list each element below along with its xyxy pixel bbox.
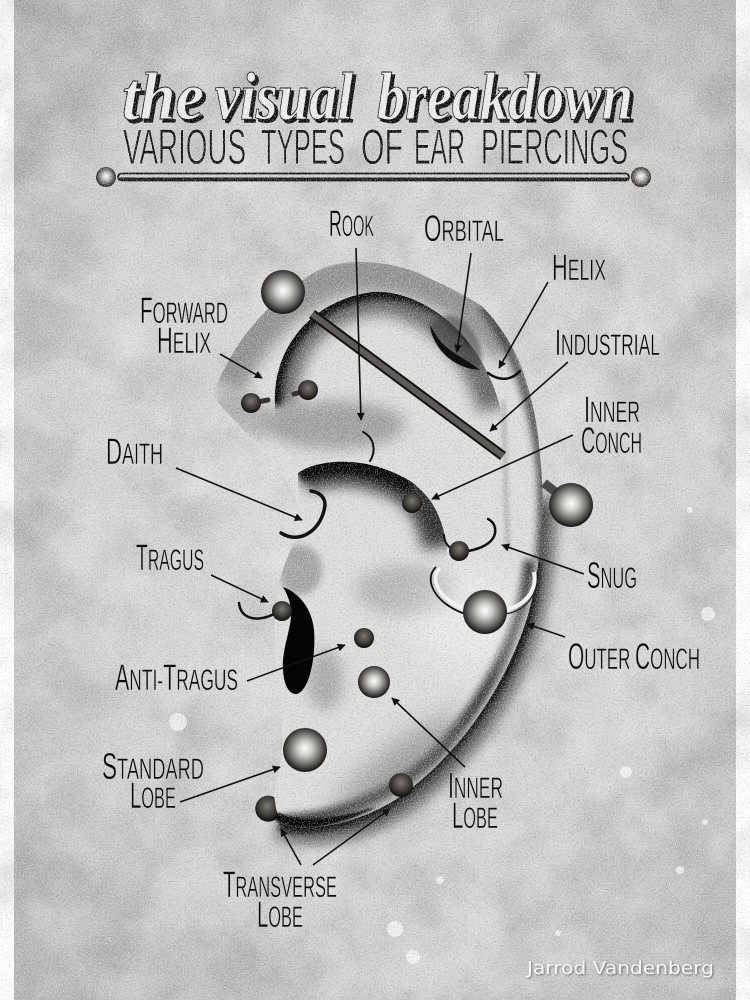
label: tragus	[136, 537, 268, 602]
label: helix	[499, 247, 606, 368]
label: outer conch: OUTER CONCH	[568, 636, 700, 677]
label: helix: HELIX	[552, 247, 606, 288]
piercing: industrial barbell	[312, 314, 593, 527]
label: inner lobe: LOBE	[452, 795, 498, 836]
title: the visual breakdown: the	[125, 61, 207, 137]
arrow: helix	[499, 282, 548, 368]
title: the visual breakdown	[122, 58, 636, 137]
piercing: inner conch	[402, 493, 422, 513]
label: transverse lobe: LOBE	[257, 894, 303, 935]
subtitle: various types of ear piercings: EAR	[414, 119, 465, 175]
subtitle: various types of ear piercings	[123, 119, 628, 175]
concha fold shadow	[298, 462, 447, 545]
piercing: anti-tragus	[354, 628, 374, 648]
label: standard lobe: STANDARD	[102, 746, 204, 787]
arrow: inner conch	[432, 435, 573, 499]
label: snug	[502, 545, 637, 596]
arrow: tragus	[211, 575, 268, 602]
label: orbital	[424, 208, 504, 352]
label: inner conch	[432, 389, 642, 499]
title: the visual breakdown: breakdown	[380, 61, 636, 137]
label: standard lobe	[102, 746, 280, 816]
label: orbital: ORBITAL	[424, 208, 504, 249]
arrow: daith	[176, 468, 302, 520]
arrow: rook	[356, 248, 361, 420]
ear drop shadow	[280, 500, 541, 830]
arrow: snug	[502, 545, 584, 574]
piercing: transverse lobe	[255, 773, 413, 822]
label: transverse lobe: TRANSVERSE	[223, 864, 337, 905]
subtitle: various types of ear piercings: PIERCINGS	[481, 119, 628, 175]
label: outer conch	[527, 624, 700, 677]
label: forward helix	[140, 290, 262, 378]
label: industrial: INDUSTRIAL	[555, 322, 660, 363]
arrow: industrial	[490, 362, 568, 431]
label: inner conch: CONCH	[581, 420, 642, 461]
piercing: orbital	[430, 316, 481, 370]
title barbell divider	[96, 167, 651, 187]
arrow: outer conch	[527, 624, 565, 637]
label: standard lobe: LOBE	[130, 775, 176, 816]
piercing: daith ring	[281, 491, 325, 537]
label: industrial	[490, 322, 660, 431]
piercing: inner lobe	[358, 666, 390, 698]
piercing: outer conch ring	[431, 567, 537, 634]
label: forward helix: HELIX	[157, 320, 211, 361]
subtitle: various types of ear piercings: TYPES	[261, 119, 345, 175]
piercing: rook	[363, 432, 374, 461]
watermark: artist credit: Jarrod Vandenberg	[526, 958, 714, 979]
title: the visual breakdown: visual	[215, 58, 353, 134]
arrow: anti-tragus	[247, 645, 345, 681]
piercing: tragus	[239, 601, 292, 621]
piercing: snug	[444, 519, 495, 561]
title: the visual breakdown: the	[122, 58, 204, 134]
ear body	[212, 262, 543, 828]
label: snug: SNUG	[587, 555, 637, 596]
label: transverse lobe	[223, 809, 390, 935]
arrow: forward helix	[220, 354, 262, 378]
subtitle: various types of ear piercings: OF	[361, 119, 403, 175]
arrow: inner lobe	[392, 698, 465, 767]
piercing: helix ring	[488, 371, 520, 379]
ear canal	[283, 587, 314, 694]
ear shading	[215, 272, 543, 840]
label: tragus: TRAGUS	[136, 537, 204, 578]
arrow: standard lobe	[180, 767, 280, 802]
arrow: orbital	[457, 253, 471, 352]
ear illustration	[212, 262, 543, 840]
arrows: transverse lobe	[281, 809, 390, 865]
label: inner lobe	[392, 698, 503, 836]
subtitle: various types of ear piercings: VARIOUS	[123, 119, 246, 175]
label: daith: DAITH	[106, 431, 163, 472]
piercing: forward helix	[241, 270, 318, 413]
label: rook	[329, 203, 374, 420]
helix fold shadow	[275, 292, 500, 407]
lobe bottom shadow	[275, 806, 378, 828]
label: daith	[106, 431, 302, 520]
title: the visual breakdown: visual	[218, 61, 356, 137]
label: inner conch: INNER	[584, 389, 640, 430]
piercing: standard lobe	[283, 728, 327, 772]
label: anti-tragus	[115, 645, 345, 698]
label: anti-tragus: ANTI-TRAGUS	[115, 657, 238, 698]
label: rook: ROOK	[329, 203, 374, 244]
label: inner lobe: INNER	[448, 765, 503, 806]
label: forward helix: FORWARD	[140, 290, 228, 331]
title: the visual breakdown: breakdown	[377, 58, 633, 134]
